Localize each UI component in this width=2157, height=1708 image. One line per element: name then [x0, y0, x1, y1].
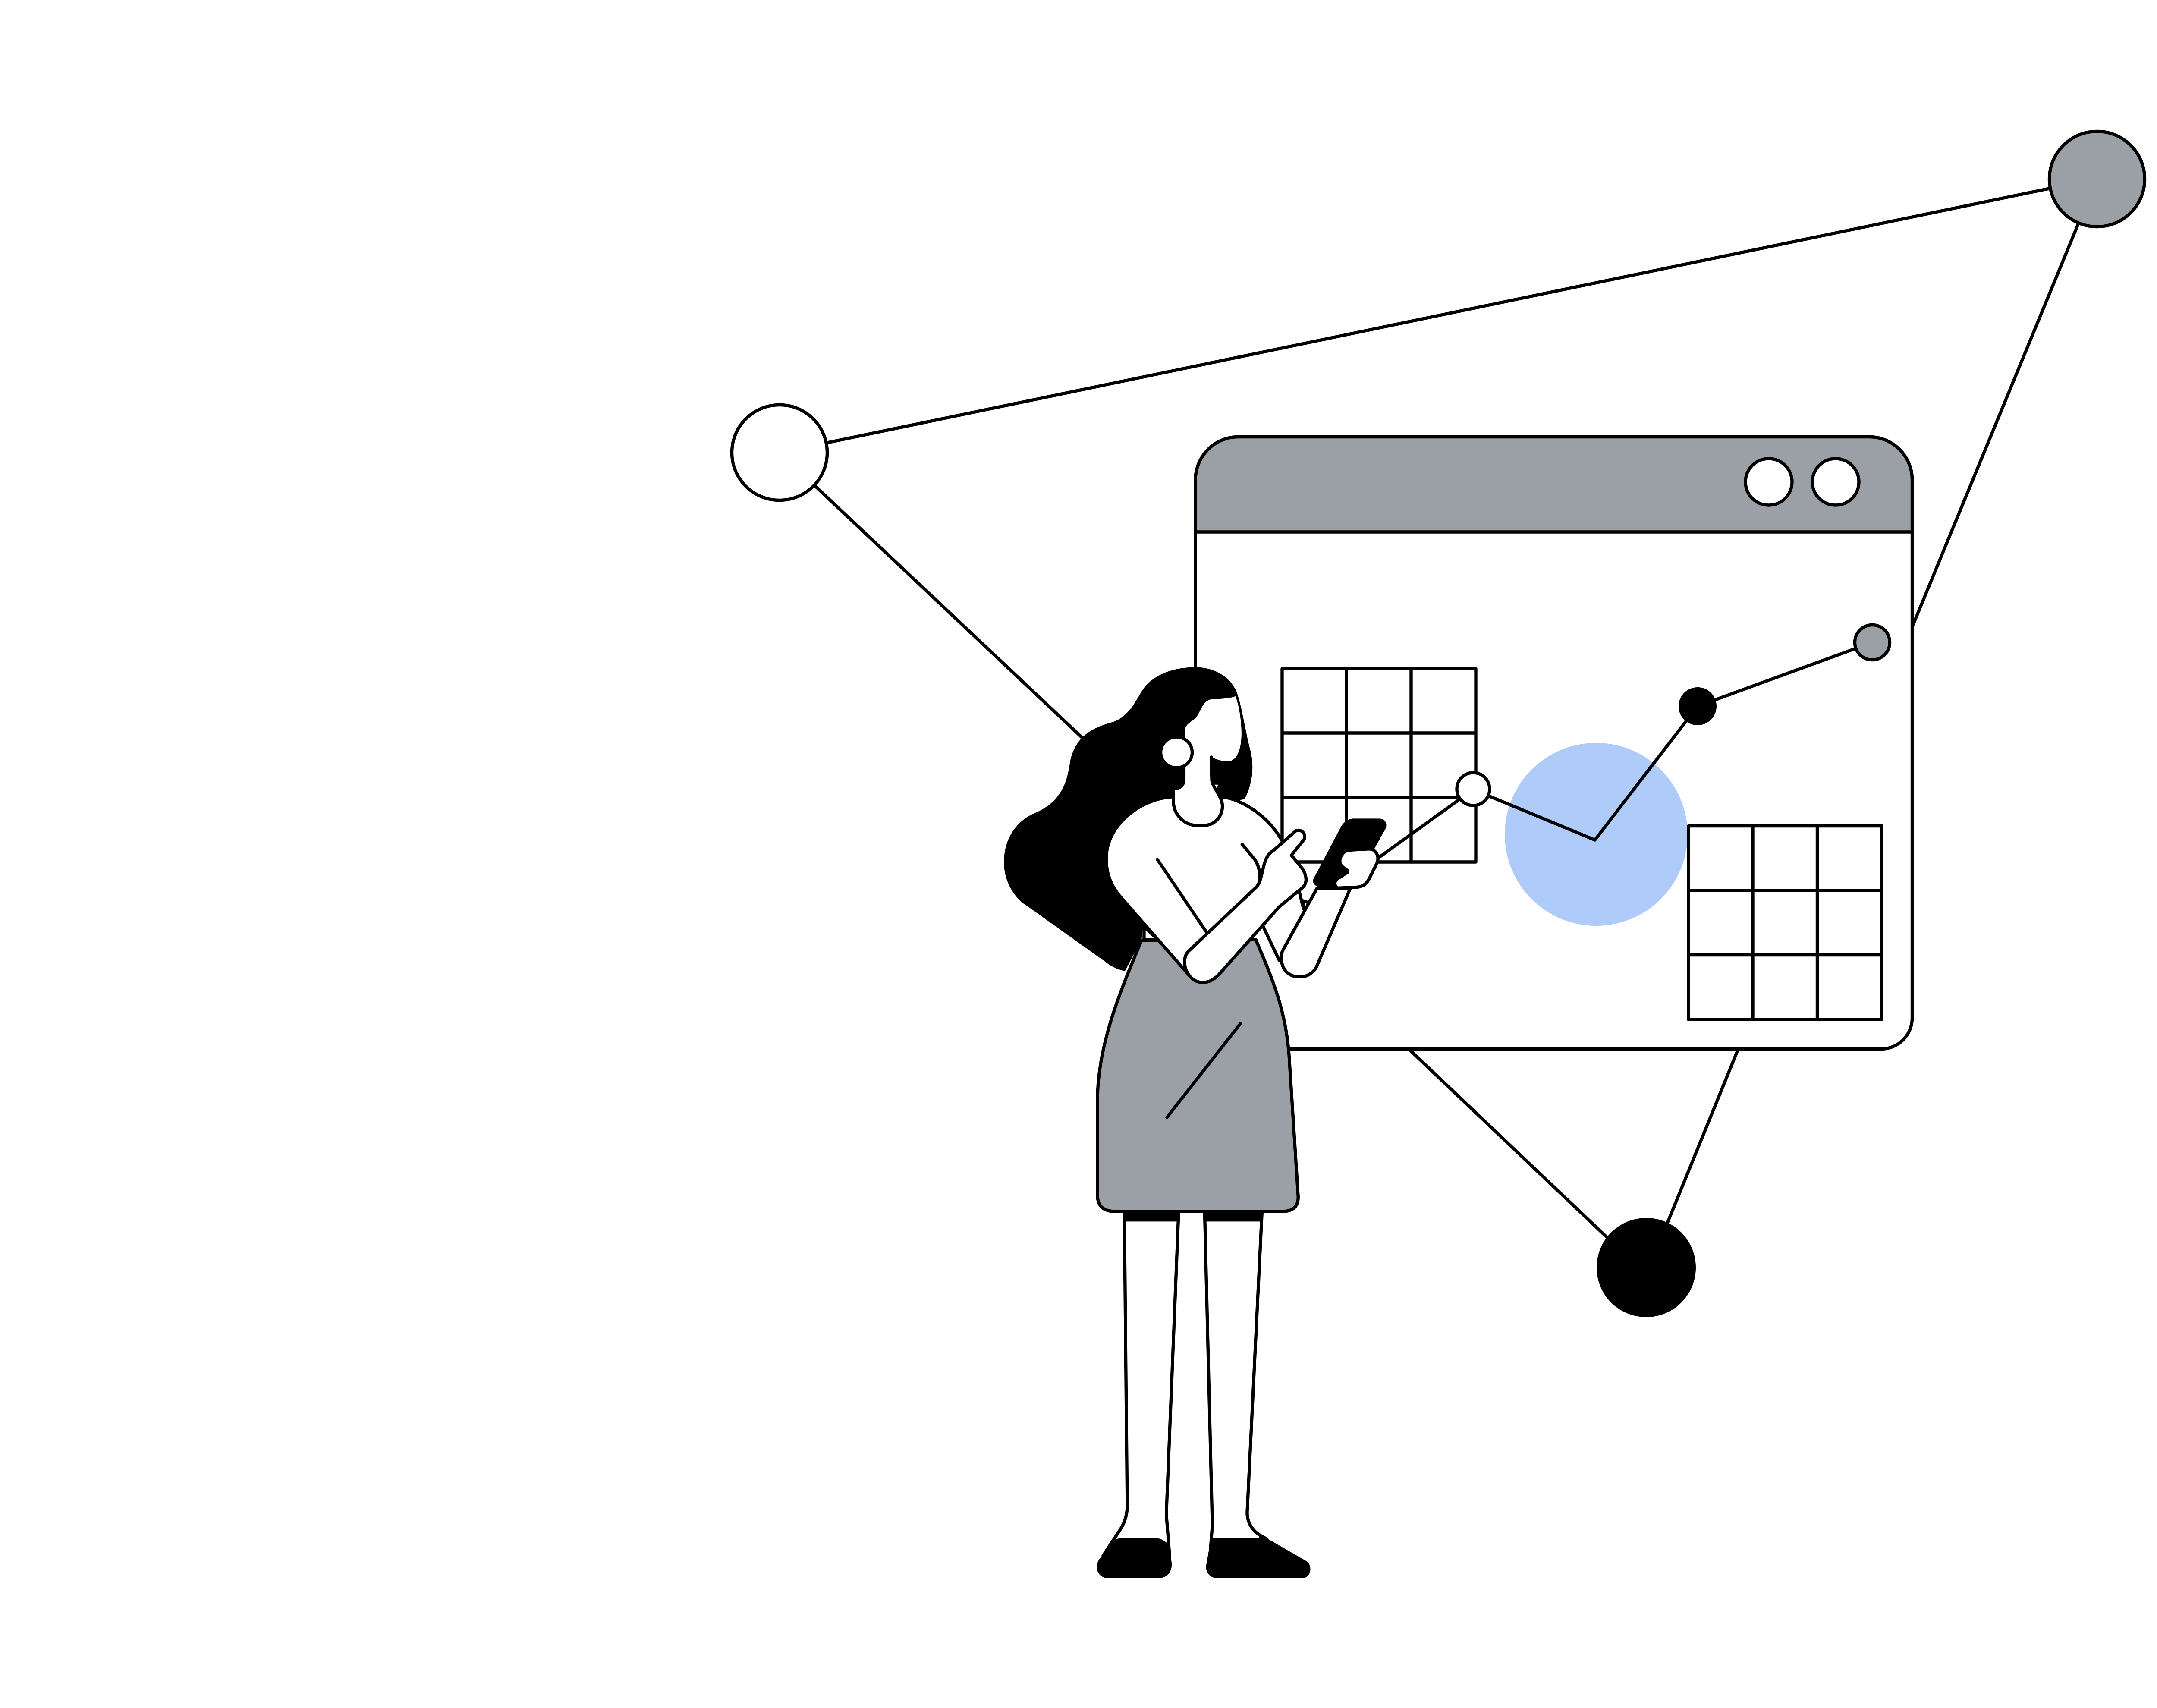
- window button one: [1745, 459, 1792, 505]
- node: grey circle top right: [2049, 131, 2145, 227]
- torso fold left: [1157, 859, 1207, 932]
- blue circle: [1505, 743, 1688, 926]
- chart point grey: [1855, 625, 1890, 660]
- table grid right: [1688, 826, 1882, 1019]
- upper body: [1106, 696, 1386, 982]
- hair: [1004, 667, 1252, 971]
- window button two: [1812, 459, 1859, 505]
- ear: [1161, 737, 1192, 768]
- left leg: [1103, 1211, 1179, 1556]
- torso outline: [1106, 797, 1283, 975]
- phone: [1313, 818, 1386, 888]
- node: black circle bottom: [1597, 1218, 1696, 1317]
- person: [1004, 667, 1386, 1578]
- neck outline: [1173, 757, 1223, 825]
- chart polyline: [1379, 642, 1872, 857]
- left sock band: [1123, 1211, 1179, 1221]
- skirt fold: [1167, 1024, 1240, 1117]
- skirt: [1097, 940, 1298, 1211]
- table grid left: [1282, 669, 1476, 862]
- browser window: [1195, 437, 1912, 1049]
- far arm sleeve lines: [1263, 890, 1308, 960]
- window body: [1195, 437, 1912, 1049]
- left shoe: [1097, 1538, 1172, 1578]
- right leg: [1204, 1211, 1267, 1556]
- legs and shoes: [1097, 1211, 1310, 1578]
- hand on phone: [1335, 849, 1378, 888]
- near arm and hand: [1185, 830, 1306, 982]
- right shoe: [1206, 1535, 1310, 1578]
- line chart: [1379, 625, 1890, 857]
- node: white circle left: [732, 405, 827, 500]
- torso: [1106, 797, 1284, 975]
- face and neck: [1173, 696, 1242, 825]
- chart point black: [1679, 687, 1717, 725]
- torso fold right: [1242, 844, 1260, 886]
- neck highlight: [1214, 785, 1218, 788]
- far forearm: [1281, 888, 1350, 977]
- waist gap: [1144, 927, 1158, 940]
- right sock band: [1204, 1211, 1263, 1221]
- window header bar: [1195, 437, 1912, 532]
- network connecting lines: [815, 189, 2078, 1237]
- chart point white: [1457, 773, 1490, 805]
